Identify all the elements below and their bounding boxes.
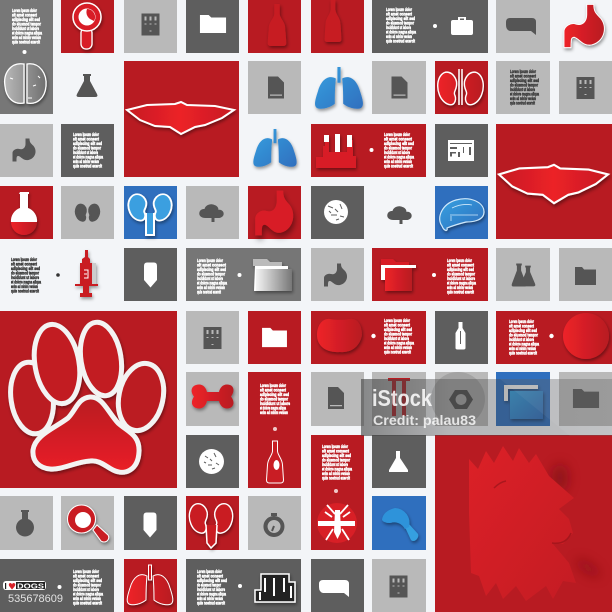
text block: sit amet consect (73, 136, 99, 142)
icon: round flask (11, 192, 37, 235)
rooster details (494, 481, 571, 543)
text block: Lorem ipsum dolor (322, 444, 348, 449)
text block: incididunt ut labore (12, 26, 39, 31)
text block: et dolore magna aliqua (386, 29, 416, 34)
text block: incididunt ut labore (322, 462, 348, 467)
text block (509, 319, 539, 355)
text block: do eiusmod tempor (386, 20, 414, 26)
icon: paw (6, 319, 170, 472)
text block: sit amet consect (384, 322, 410, 328)
text block: quis nostrud exercit (197, 289, 221, 294)
panel: paw print (0, 311, 177, 488)
text block: incididunt ut labore (384, 336, 409, 341)
panel: bone tile (186, 372, 239, 426)
panel: folder tile 3 (559, 372, 612, 426)
watermark credit: Credit: palau83 (373, 412, 476, 428)
text block: Lorem ipsum dolor (12, 8, 37, 13)
text block: incididunt ut labore (197, 276, 223, 281)
panel: white brain tile (311, 186, 364, 239)
text block: quis nostrud exercit (322, 475, 350, 480)
panel: blue brain tile (435, 186, 488, 239)
text block: adipiscing elit sed (447, 267, 474, 272)
text block: adipiscing elit sed (384, 327, 412, 332)
icon: binder (204, 327, 222, 349)
icon: binder (142, 14, 160, 36)
icon: bone (192, 384, 234, 409)
text block: quis nostrud exercit (510, 100, 535, 105)
panel: text and outlined bottle (248, 372, 301, 488)
text block: Lorem ipsum dolor (509, 319, 534, 324)
text block: et dolore magna aliqua (384, 340, 414, 345)
text block: adipiscing elit sed (384, 141, 414, 146)
badge: I love dogs: I (4, 582, 7, 591)
connector dot (56, 273, 60, 277)
text block: enim ad minim veniam (11, 284, 38, 289)
text block: sit amet consect (510, 73, 536, 79)
panel: folder tile (186, 0, 239, 53)
text block: sit amet consect (509, 323, 534, 329)
icon: magnifier (382, 508, 418, 541)
icon: speech bubble (319, 580, 349, 597)
text block: Lorem ipsum dolor (73, 569, 99, 574)
panel: red folder tile (248, 311, 301, 364)
panel: wings tile 2 (496, 124, 612, 239)
icon: bottle outline (266, 441, 284, 483)
text block: Lorem ipsum dolor (260, 383, 286, 388)
text block: quis nostrud exercit (197, 600, 225, 605)
icon: magnifier (68, 505, 109, 542)
icon: brain (324, 200, 348, 224)
panel: pencil tile (124, 248, 177, 301)
watermark band (361, 372, 612, 436)
text block: Lorem ipsum dolor (384, 132, 410, 137)
text block (73, 569, 103, 605)
text block: quis nostrud exercit (386, 38, 415, 43)
text block: quis nostrud exercit (73, 163, 102, 168)
text block (510, 69, 539, 105)
text block: Lorem ipsum dolor (510, 69, 536, 74)
text block: et dolore magna aliqua (322, 466, 352, 471)
icon: browser window (448, 140, 474, 161)
bar chart (316, 134, 356, 168)
text block: adipiscing elit sed (510, 78, 539, 83)
text block: et dolore magna aliqua (197, 280, 227, 285)
text block: Lorem ipsum dolor (447, 258, 472, 263)
text block: do eiusmod tempor (73, 582, 101, 588)
icon: brain ball (199, 449, 224, 474)
panel: text and red circle (496, 311, 612, 364)
text block: enim ad minim veniam (384, 159, 412, 164)
text block (447, 258, 476, 294)
icon: binder (576, 77, 594, 99)
text block: Lorem ipsum dolor (197, 569, 222, 574)
panel: rooster (435, 435, 612, 612)
icon: red circle (563, 313, 609, 359)
badge: I love dogs: ♥ (8, 582, 16, 592)
icon: brain side view (440, 199, 484, 230)
text block: incididunt ut labore (260, 401, 290, 406)
text block: Lorem ipsum dolor (73, 132, 99, 137)
text block: et dolore magna aliqua (510, 91, 539, 96)
icon: document (268, 76, 284, 98)
icon: flask (389, 451, 408, 472)
icon: bottle (268, 4, 286, 46)
icon: kidneys with ureters (128, 194, 172, 235)
panel: pencil tile 2 (124, 496, 177, 550)
text block: do eiusmod tempor (510, 82, 538, 88)
panel: magnifier tile (61, 0, 114, 53)
text block: adipiscing elit sed (73, 141, 102, 146)
text block (11, 257, 41, 293)
text block: adipiscing elit sed (197, 267, 226, 272)
icon: folder (253, 259, 292, 291)
icon: briefcase (451, 17, 473, 35)
icon: cloud (199, 204, 224, 222)
panel: text and syringe (11, 250, 98, 297)
text block: Lorem ipsum dolor (197, 258, 223, 263)
icon: pencil (144, 512, 156, 538)
text block: do eiusmod tempor (322, 457, 350, 463)
icon: bars (255, 574, 295, 602)
text block: sit amet consect (11, 261, 37, 267)
text block: quis nostrud exercit (73, 600, 102, 605)
panel: text and mosquito (311, 435, 364, 550)
panel: text and brain (0, 0, 53, 114)
icon: stopwatch (263, 513, 284, 537)
text block: enim ad minim veniam (322, 471, 350, 476)
icon: folder (200, 15, 226, 33)
panel: stomach tile 2 (311, 248, 364, 301)
text block: adipiscing elit sed (197, 578, 227, 583)
panel: bar chart and text (311, 124, 426, 177)
icon: mosquito (317, 503, 357, 543)
panel: red bottle tile (248, 0, 301, 53)
text block: Lorem ipsum dolor (386, 7, 412, 12)
text block (260, 383, 290, 415)
text block: do eiusmod tempor (260, 396, 288, 402)
text block: sit amet consect (447, 262, 474, 268)
panel: blue folder tile (496, 372, 550, 426)
panel: dark kidneys tile (61, 186, 114, 239)
text block (386, 7, 416, 43)
text block: adipiscing elit sed (11, 266, 40, 271)
panel: binder tile 2 (559, 61, 612, 114)
text block: adipiscing elit sed (509, 328, 537, 333)
text block: et dolore magna aliqua (11, 279, 41, 284)
text block (384, 132, 414, 168)
watermark logo text: iStock (372, 385, 432, 411)
icon: bottle (456, 322, 466, 350)
text block: et dolore magna aliqua (197, 591, 226, 596)
text block: do eiusmod tempor (73, 145, 101, 151)
text block: sit amet consect (384, 136, 412, 142)
connector dot (238, 273, 242, 277)
panel: outlined lungs tile (124, 559, 177, 612)
text block: do eiusmod tempor (12, 21, 41, 27)
panel: flasks tile (496, 248, 550, 301)
text block: adipiscing elit sed (322, 453, 351, 458)
icon: magnifier (73, 3, 101, 49)
text block: Lorem ipsum dolor (11, 257, 37, 262)
text block (322, 444, 352, 480)
panel: stomach tile (0, 124, 53, 177)
icon: blue lungs (315, 67, 363, 109)
icon: lungs (127, 565, 173, 605)
icon: folder (504, 385, 543, 419)
panel: stopwatch tile (248, 496, 301, 550)
panel: white bubble tile (311, 559, 364, 612)
text block: incididunt ut labore (447, 276, 475, 281)
text block: et dolore magna aliqua (509, 341, 539, 346)
panel: white bottle tile (435, 311, 488, 364)
text block: et dolore magna aliqua (73, 154, 103, 159)
text block: enim ad minim veniam (384, 345, 412, 350)
icon: wings emblem (499, 165, 608, 203)
connector dot (334, 489, 338, 493)
panel: text tile (496, 61, 550, 114)
text block (384, 318, 414, 354)
icon: folder (262, 328, 287, 347)
panel: dark text tile (61, 124, 114, 177)
panel: red folder and text (372, 248, 488, 301)
text block: do eiusmod tempor (447, 271, 475, 277)
icon: flask (77, 74, 97, 97)
text block: sit amet consect (322, 448, 349, 454)
text block: quis nostrud exercit (447, 289, 474, 294)
icon: binder (390, 576, 408, 598)
text block: do eiusmod tempor (509, 332, 538, 338)
text block: do eiusmod tempor (384, 331, 412, 337)
text block: incididunt ut labore (11, 275, 39, 280)
text block: incididunt ut labore (509, 337, 534, 342)
panel: red bottle tile 2 (311, 0, 364, 53)
text block: sit amet consect (260, 387, 286, 393)
text block: sit amet consect (197, 573, 223, 579)
icon: round flask (16, 510, 34, 536)
icon: apple (317, 319, 362, 352)
text block: et dolore magna aliqua (12, 30, 42, 35)
text block: enim ad minim veniam (12, 35, 41, 40)
icon: stomach (324, 264, 347, 286)
icon: blue lungs 2 (253, 129, 297, 167)
connector dot (432, 273, 436, 277)
text block: adipiscing elit sed (386, 16, 415, 21)
panel: blue kidneys tile (124, 186, 177, 239)
text block: et dolore magna aliqua (447, 280, 476, 285)
text block: et dolore magna aliqua (384, 154, 414, 159)
text block: do eiusmod tempor (384, 145, 412, 151)
icon: kidneys (189, 504, 233, 548)
text block: do eiusmod tempor (11, 270, 39, 276)
shadow smudges (552, 464, 602, 579)
connector dot (433, 24, 437, 28)
icon: cloud (387, 206, 412, 224)
panel: binder tile (124, 0, 177, 53)
text block (73, 132, 103, 168)
text block (12, 8, 42, 44)
icon: stomach (12, 138, 36, 162)
panel: document tile (248, 61, 301, 114)
panel: cloud tile (186, 186, 239, 239)
text block: incididunt ut labore (384, 150, 410, 155)
text block: enim ad minim veniam (386, 34, 412, 39)
panel: speech bubble tile (496, 0, 550, 53)
connector dot (370, 148, 374, 152)
panel: flask tile bottom (0, 496, 53, 550)
panel: white round tile (186, 435, 239, 488)
icon: folder (573, 389, 599, 408)
icon: wings emblem (127, 102, 234, 134)
badge: I love dogs: DOGS (17, 583, 44, 590)
panel: kidneys tile (435, 61, 488, 114)
text block: enim ad minim veniam (197, 596, 223, 601)
icon: document (328, 387, 344, 409)
text block: enim ad minim veniam (509, 346, 536, 351)
text block: adipiscing elit sed (12, 17, 40, 22)
text block: incididunt ut labore (510, 87, 535, 92)
panel: wings tile (124, 61, 239, 177)
icon: speech bubble (506, 18, 536, 35)
text block: sit amet consect (386, 11, 412, 17)
icon: stomach (255, 191, 293, 235)
connector dot (238, 584, 242, 588)
text block: quis nostrud exercit (11, 288, 39, 293)
text block: adipiscing elit sed (73, 578, 102, 583)
icon: flasks (512, 264, 535, 286)
icon: folder (575, 267, 596, 285)
panel: document tile 3 (311, 372, 364, 426)
panel: document tile 2 (372, 61, 426, 114)
panel: blue magnifier tile (372, 496, 426, 550)
badge: I love dogs (3, 581, 46, 592)
panel: round flask tile (0, 186, 53, 239)
text block: quis nostrud exercit (384, 349, 411, 354)
text block: enim ad minim veniam (447, 285, 473, 290)
text block: quis nostrud exercit (12, 39, 40, 44)
panel: binder tile 3 (186, 311, 239, 364)
panel: hex nut tile (435, 372, 488, 426)
text block: enim ad minim veniam (260, 410, 288, 415)
text block: et dolore magna aliqua (260, 405, 286, 410)
panel: text and bars icon (186, 559, 301, 612)
icon: folder (381, 259, 416, 291)
icon: kidneys (438, 69, 483, 105)
connector dot (371, 334, 376, 338)
icon: document (392, 76, 408, 98)
text block: incididunt ut labore (386, 25, 411, 30)
text block (197, 258, 227, 294)
panel: I love dogs and text (0, 559, 114, 612)
text block: sit amet consect (12, 12, 37, 18)
text block: sit amet consect (197, 262, 226, 268)
text block: incididunt ut labore (73, 150, 98, 155)
panel: binder tile 4 (372, 559, 426, 612)
text block: do eiusmod tempor (197, 271, 225, 277)
text block: enim ad minim veniam (73, 159, 99, 164)
panel: white flask tile (372, 435, 426, 488)
connector dot (273, 427, 277, 431)
text block: quis nostrud exercit (509, 350, 537, 355)
icon: rooster head (469, 446, 576, 601)
text block: sit amet consect (73, 573, 99, 579)
icon: syringe (75, 250, 98, 297)
number: 535678609 (8, 593, 63, 605)
text block: adipiscing elit sed (260, 392, 289, 397)
panel: red stomach tile (248, 186, 301, 239)
text block: incididunt ut labore (197, 587, 225, 592)
icon: pillars (388, 378, 410, 416)
text block: enim ad minim veniam (197, 285, 225, 290)
text block: et dolore magna aliqua (73, 591, 103, 596)
text block: do eiusmod tempor (197, 582, 221, 588)
text block: incididunt ut labore (73, 587, 99, 592)
panel: red magnifier tile (61, 496, 114, 550)
connector dot (58, 585, 62, 589)
icon: brain (5, 64, 46, 103)
panel: kidneys tile 2 (186, 496, 239, 550)
panel: text and briefcase (372, 0, 488, 53)
text block (197, 569, 227, 605)
icon: red stomach (564, 4, 604, 48)
icon: bottle (324, 0, 342, 42)
text block: quis nostrud exercit (384, 163, 413, 168)
panel: folder tile 2 (559, 248, 612, 301)
panel: window tile (435, 124, 488, 177)
icon: hex nut (449, 390, 473, 409)
icon: kidneys (76, 205, 99, 220)
connector dot (22, 50, 26, 54)
text block: Lorem ipsum dolor (384, 318, 410, 323)
icon: pencil (144, 262, 157, 288)
text block: enim ad minim veniam (510, 96, 536, 101)
text block: enim ad minim veniam (73, 596, 101, 601)
connector dot (549, 334, 554, 338)
panel: text and folder (186, 248, 301, 301)
panel: pillars tile (372, 372, 426, 426)
panel: apple and text (311, 311, 426, 364)
